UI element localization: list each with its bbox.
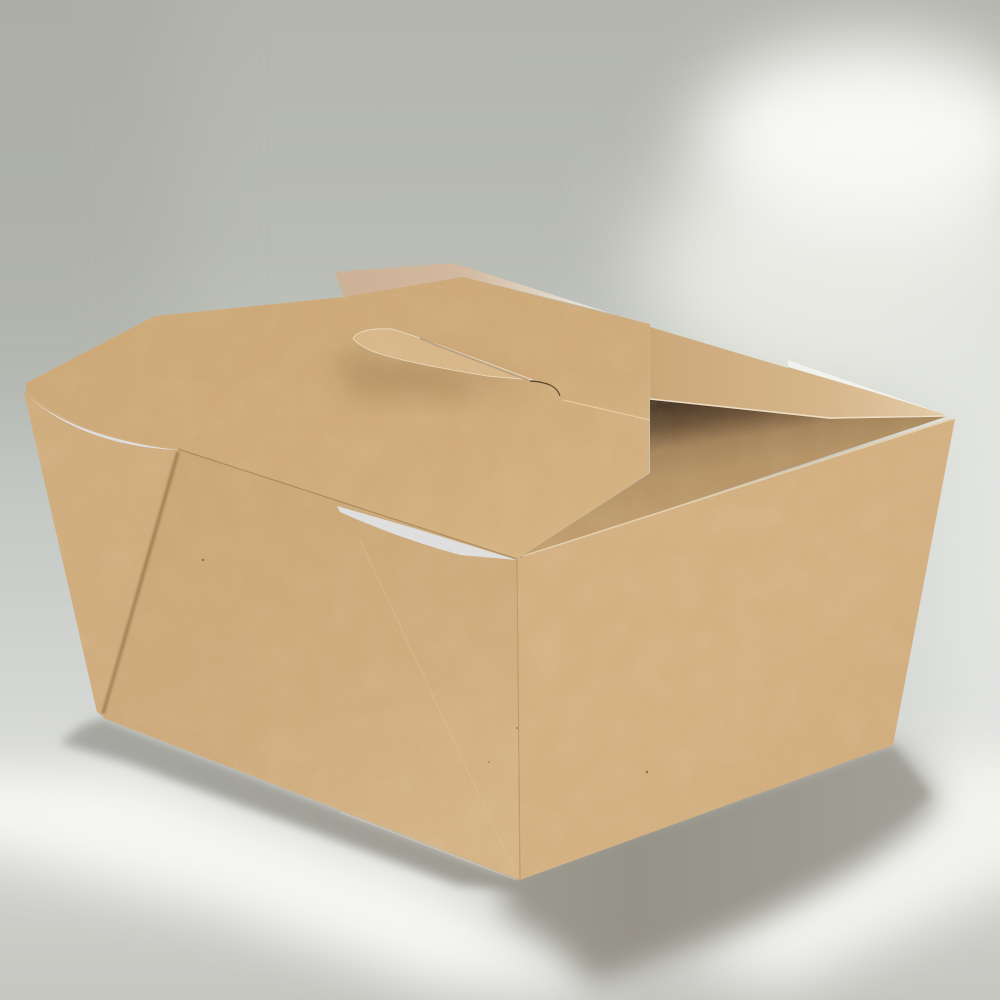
left corner fold: [24, 392, 178, 716]
mottled paper tone: [650, 416, 651, 418]
backdrop upper left falloff: [0, 0, 180, 440]
center white paper edge: [337, 506, 517, 560]
back right flap: [650, 327, 947, 419]
box: [24, 263, 955, 880]
dark slit opening: [530, 381, 560, 396]
core shadow: [60, 718, 930, 935]
top flap front edge: [178, 449, 517, 559]
bottom edge highlight: [340, 812, 517, 880]
floor light: right band: [680, 740, 1000, 985]
right face: [517, 419, 955, 880]
left face diagonal fold: [360, 540, 515, 872]
paper grain: [0, 250, 1000, 890]
left face: [103, 449, 520, 880]
floor light: left and centre band: [0, 765, 610, 1000]
soft shadow on right: [500, 745, 937, 983]
upper edge highlight of right face: [523, 419, 952, 556]
interior opening: [517, 398, 948, 559]
heart tab: [353, 329, 533, 380]
tab slit upper lip: [420, 338, 530, 381]
paper specks: [202, 559, 648, 773]
backdrop light: upper right glow: [700, 40, 1000, 230]
top front flap: [26, 277, 650, 559]
fold crease on left corner: [103, 452, 178, 714]
vertical corner seam: [517, 560, 520, 880]
rear flap behind tab: [335, 263, 610, 313]
cream lower edge of back right flap: [650, 399, 947, 418]
backdrop light: wide halo on right: [640, 130, 1000, 780]
white edge on back right flap: [788, 360, 947, 415]
left white paper edge: [28, 396, 177, 450]
floor shadow: [60, 718, 937, 983]
tab shadow: [335, 350, 530, 400]
flap fold line: [563, 400, 650, 420]
